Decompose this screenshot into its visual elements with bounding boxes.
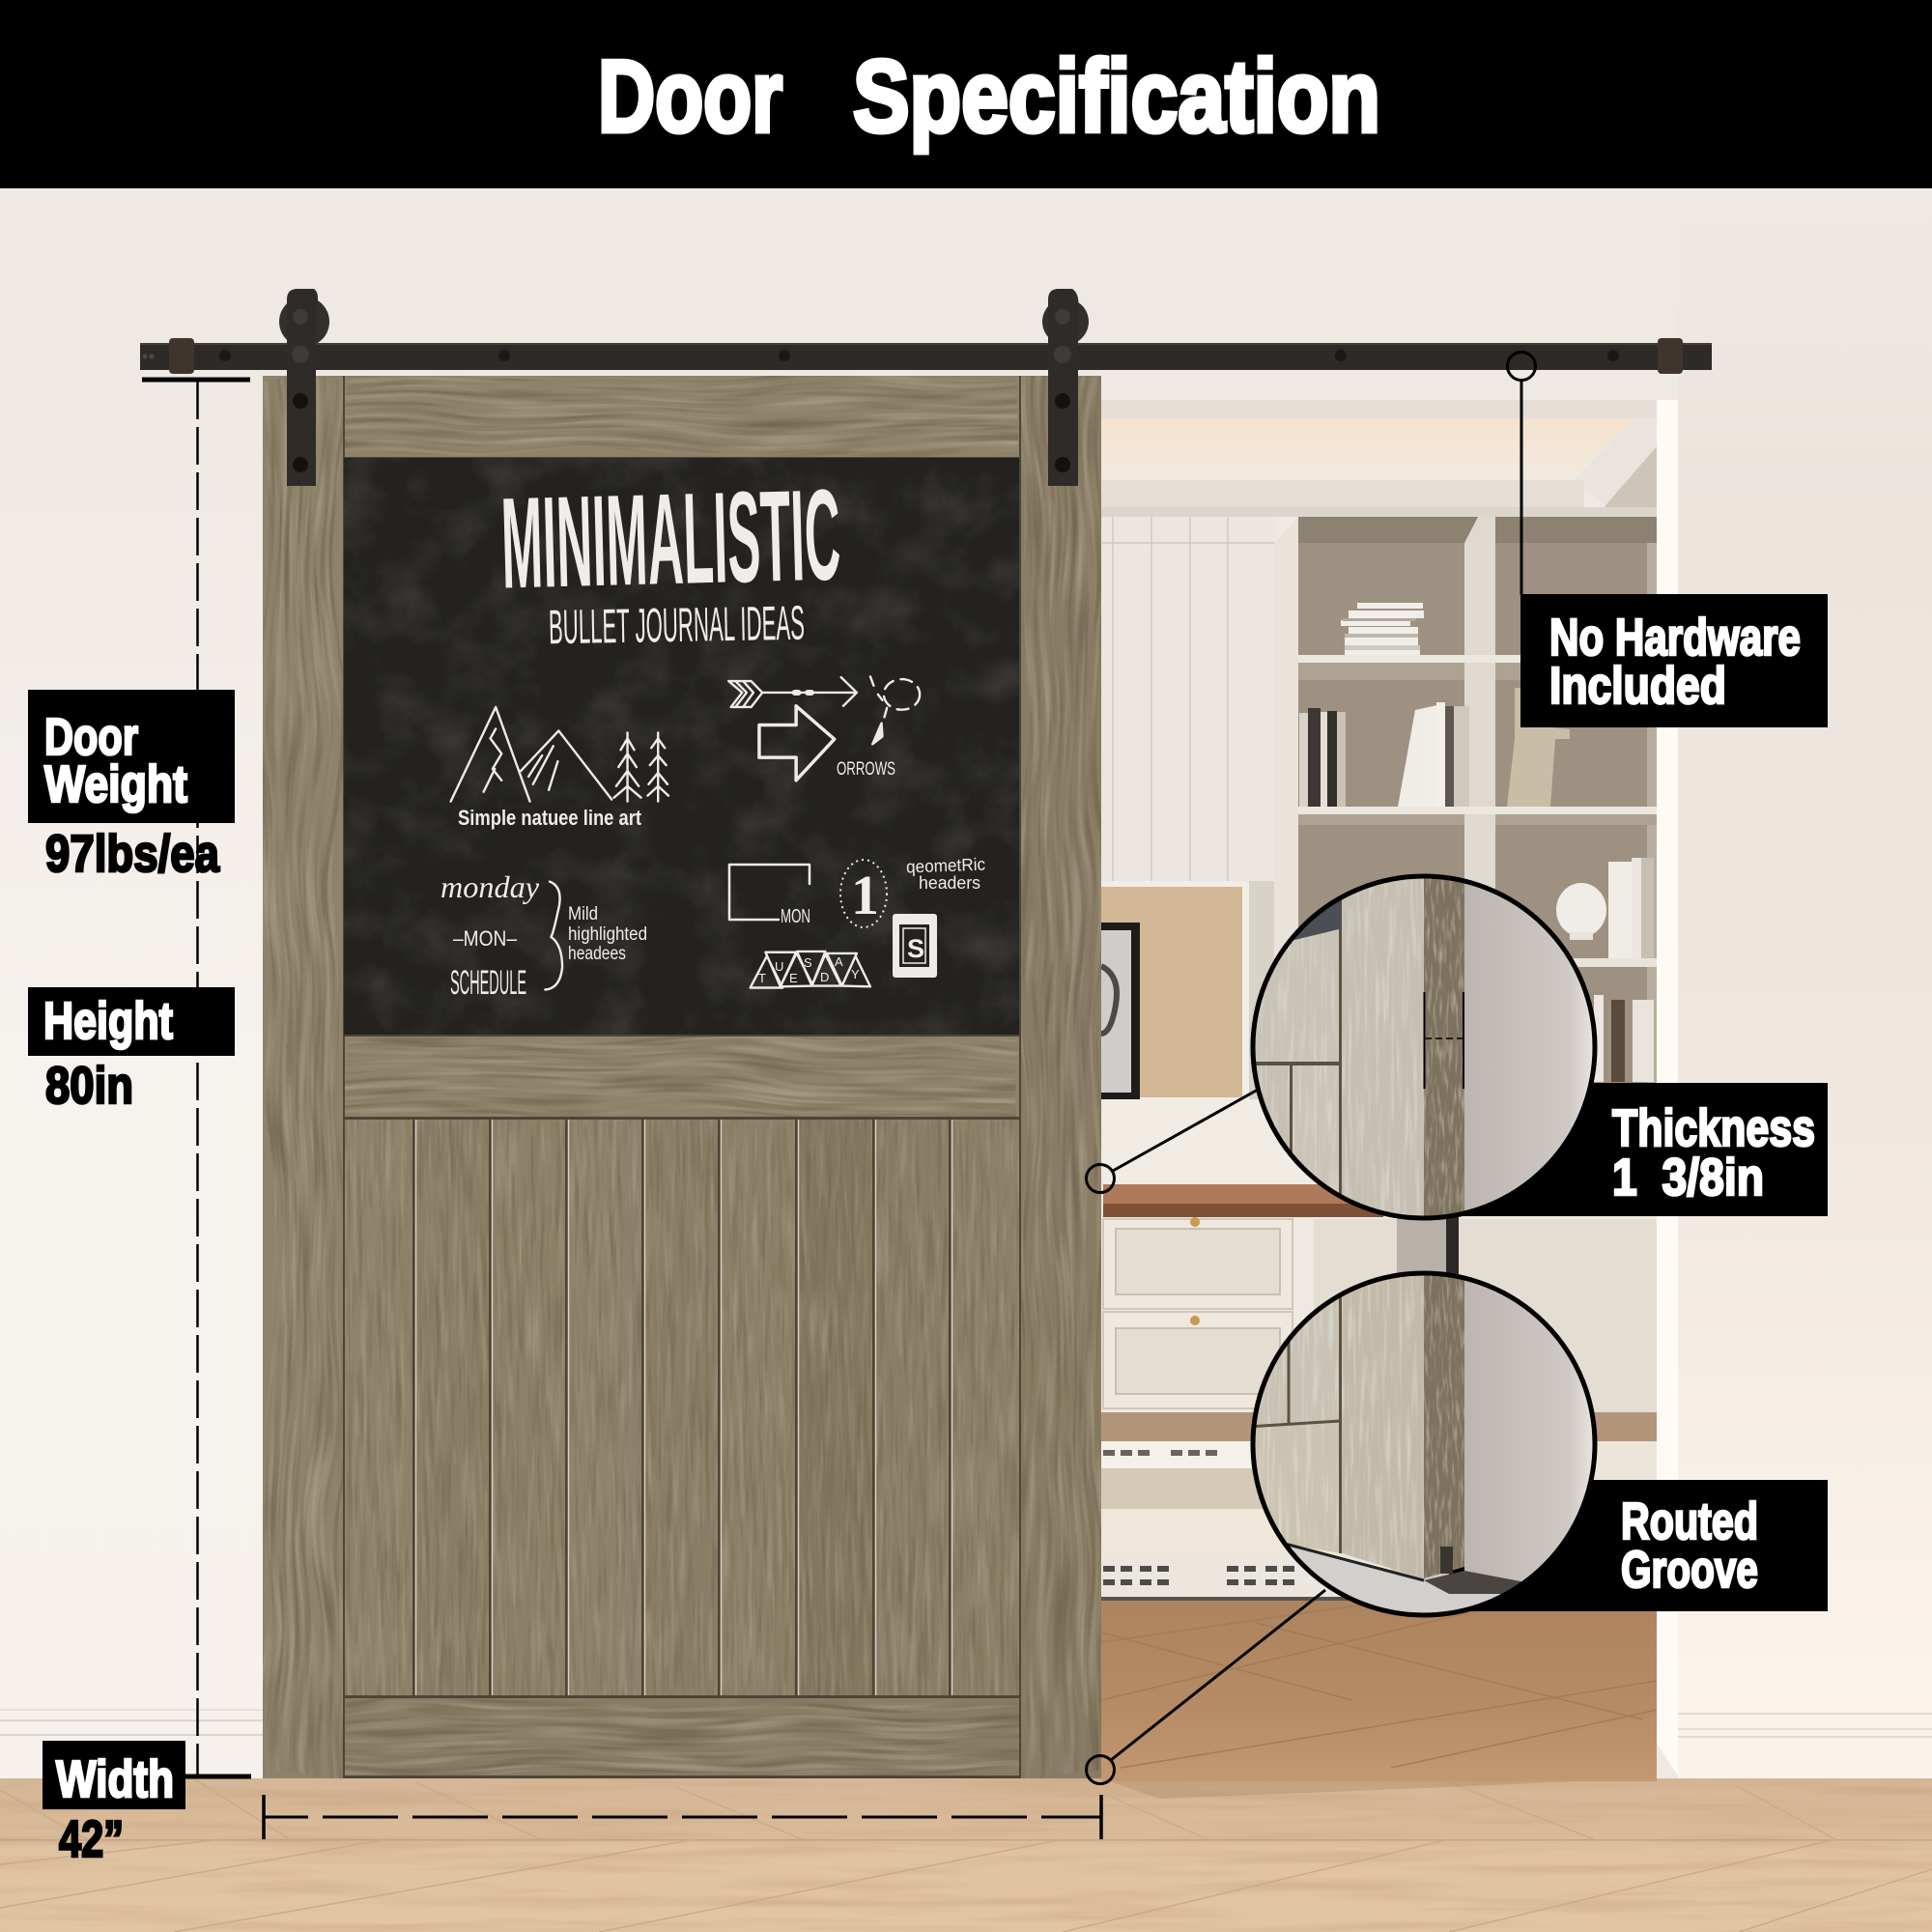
- callout: thickness: [1086, 1083, 1828, 1216]
- wood floor: [0, 1778, 1932, 1932]
- chalkboard panel: SCHEDULE: [450, 964, 526, 1002]
- sliding track rail: [140, 338, 1712, 374]
- label: width: Width: [56, 1750, 174, 1808]
- middle rail: [345, 1037, 1019, 1117]
- chalk letter tile: [893, 914, 937, 978]
- chalkboard panel: [344, 458, 1019, 1035]
- vertical planks: [345, 1120, 1019, 1695]
- width dimension line: [264, 1795, 1101, 1839]
- magnified circle: routed groove: [1246, 1265, 1604, 1633]
- left stile: [263, 376, 343, 1778]
- chalk header box: MON: MON: [781, 906, 810, 927]
- chalk headers list: [440, 869, 540, 1002]
- top rail: [345, 376, 1019, 457]
- room floor and patterned rug: [1101, 1412, 1657, 1784]
- callout: no hardware included: [1507, 352, 1828, 727]
- chalk headers list: monday: [440, 869, 540, 904]
- chalk caption: geometric headers: [906, 855, 985, 893]
- chalk bunting: tuesday: [751, 952, 870, 988]
- shelf decor: books and vase: [1299, 603, 1654, 1082]
- chalk bunting: tuesday: E: [789, 971, 798, 985]
- chalk bunting: tuesday: Y: [851, 967, 860, 981]
- left baseboard: [0, 1708, 263, 1778]
- label: door weight: Door: [44, 708, 138, 766]
- chalkboard panel: MINIMALISTIC: [499, 463, 842, 616]
- chalk note: highlighted headers: headees: [568, 944, 626, 964]
- callout: thickness: 1 3/8in: [1612, 1149, 1764, 1207]
- chalk caption: geometric headers: headers: [919, 873, 980, 893]
- chalk bunting: tuesday: T: [758, 971, 766, 985]
- door head and glowing soffit: [1101, 400, 1657, 517]
- built-in bookshelf: [1274, 517, 1657, 1122]
- chalk caption: arrows: ORROWS: [837, 759, 895, 780]
- chalk header box: MON: [729, 865, 810, 927]
- chalk bunting: tuesday: S: [804, 955, 812, 970]
- room behind door opening: [1101, 400, 1657, 1784]
- height dimension line: [142, 380, 251, 1776]
- label: height: Height: [43, 992, 173, 1050]
- beadboard wall panel: [1101, 517, 1275, 1099]
- bottom rail: [345, 1698, 1019, 1776]
- value: door weight: 97lbs/ea: [45, 825, 220, 883]
- barn door: [263, 376, 1101, 1778]
- chalk caption: geometric headers: qeometRic: [906, 855, 985, 876]
- callout: routed groove: Routed: [1621, 1492, 1758, 1550]
- chalk caption: nature line art: Simple natuee line art: [458, 806, 642, 830]
- chalk numeral in dotted circle: [840, 860, 887, 927]
- lower cabinet and wooden counter: [1101, 1099, 1657, 1417]
- title: [598, 40, 1380, 154]
- right hanger strap: [1042, 289, 1089, 486]
- chalk drawing: mountains and trees: [451, 707, 668, 802]
- framed art on counter: [1101, 881, 1249, 1099]
- chalk note: highlighted headers: highlighted: [568, 924, 647, 945]
- label: height: [28, 987, 235, 1056]
- door jamb and right baseboard: [1657, 400, 1932, 1778]
- value: height: 80in: [45, 1057, 133, 1115]
- chalk note: highlighted headers: [568, 904, 647, 964]
- chalk bunting: tuesday: A: [835, 954, 843, 969]
- chalk letter tile: S: [907, 934, 924, 963]
- title: Door: [598, 40, 782, 154]
- chalkboard panel: BULLET JOURNAL IDEAS: [548, 596, 805, 654]
- right stile: [1021, 376, 1101, 1778]
- chalk numeral in dotted circle: 1: [851, 864, 879, 926]
- chalk bunting: tuesday: D: [820, 970, 829, 984]
- callout: routed groove: [1086, 1480, 1828, 1783]
- chalk brace: [545, 882, 562, 989]
- left hanger strap: [279, 289, 329, 486]
- callout: no hardware included: No Hardware: [1549, 609, 1801, 667]
- chalk drawing: arrows: [728, 676, 920, 781]
- chalk bunting: tuesday: U: [775, 959, 783, 974]
- callout: routed groove: Groove: [1621, 1541, 1758, 1599]
- chalk note: highlighted headers: Mild: [568, 904, 598, 924]
- callout: no hardware included: Included: [1549, 657, 1726, 715]
- header band: [0, 0, 1932, 188]
- label: door weight: [28, 690, 235, 823]
- title: Specification: [853, 40, 1380, 154]
- value: width: 42”: [59, 1810, 124, 1868]
- chalk headers list: –MON–: [453, 926, 518, 951]
- magnified circle: door edge thickness: [1246, 869, 1604, 1230]
- label: door weight: Weight: [44, 755, 187, 813]
- callout: thickness: Thickness: [1612, 1099, 1815, 1157]
